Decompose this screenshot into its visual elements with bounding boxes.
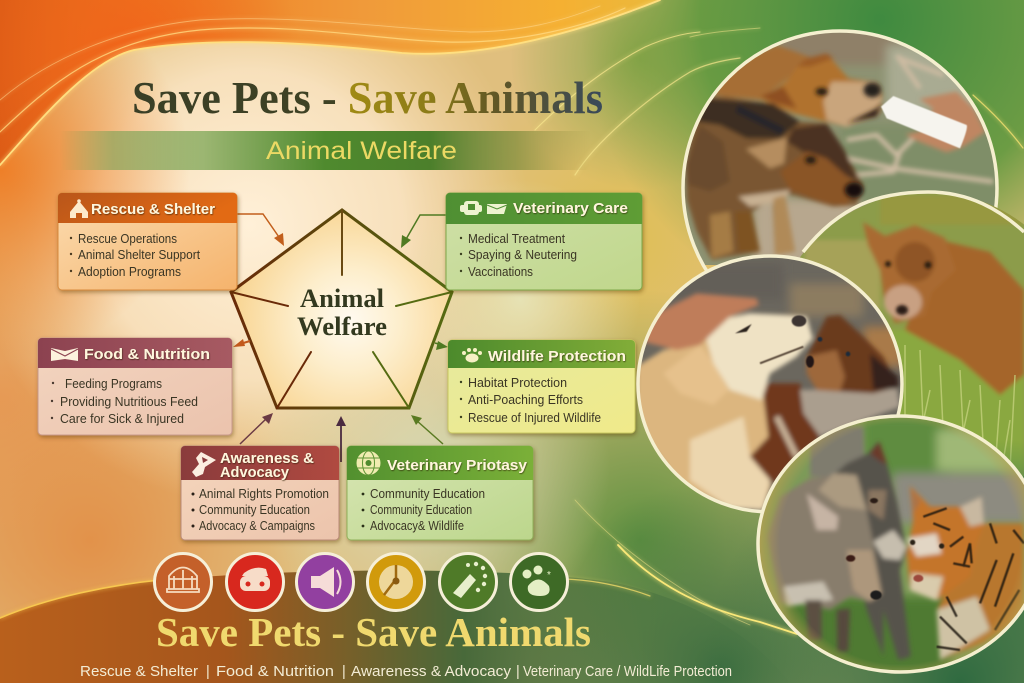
subtitle ribbon: Animal Welfare — [266, 137, 457, 165]
panel: wildlife protection: Anti-Poaching Efforts — [468, 393, 583, 407]
icon: shelter house — [70, 199, 88, 218]
panel: veterinary care: Veterinary Care — [513, 200, 628, 217]
panel: food and nutrition — [38, 338, 232, 435]
panel: food and nutrition: Food & Nutrition — [84, 346, 210, 363]
arrow: veterinary to pentagon — [401, 215, 446, 248]
panel: awareness and advocacy — [181, 446, 339, 540]
footer categories line: Awareness & Advocacy — [351, 664, 512, 680]
panel: food and nutrition: Feeding Programs — [65, 377, 162, 391]
icon: food bowl — [226, 554, 284, 610]
arrow: center to pentagon — [336, 416, 346, 462]
arrow: priority to pentagon — [411, 415, 443, 444]
panel: veterinary care: Medical Treatment — [468, 232, 565, 246]
icon: megaphone — [296, 554, 354, 610]
panel: food and nutrition: Care for Sick & Injured — [60, 412, 184, 426]
footer categories line — [80, 664, 732, 680]
panel: rescue and shelter: Adoption Programs — [78, 265, 181, 279]
icon: paw group: * — [547, 570, 551, 581]
panel: veterinary priotasy — [347, 446, 533, 540]
panel: rescue and shelter: Rescue Operations — [78, 232, 177, 246]
panel: veterinary care: Vaccinations — [468, 265, 533, 279]
panel: wildlife protection: Rescue of Injured Wildlife — [468, 411, 601, 425]
photo: golden dog and hand — [630, 250, 907, 517]
icon: paw — [462, 348, 482, 362]
icon: paw group — [510, 554, 568, 610]
subtitle ribbon — [60, 131, 590, 170]
footer categories line: Food & Nutrition — [216, 664, 334, 680]
panel: wildlife protection: Habitat Protection — [468, 376, 567, 390]
arrow: pentagon to wildlife — [435, 341, 448, 350]
panel: veterinary care — [446, 193, 642, 290]
panel: rescue and shelter: Animal Shelter Support — [78, 248, 200, 262]
panel: awareness and advocacy: Advocacy & Campaigns — [199, 519, 315, 533]
panel: awareness and advocacy: Awareness & — [220, 450, 314, 467]
panel: veterinary care: Spaying & Neutering — [468, 248, 577, 262]
photo ring — [803, 192, 1024, 252]
panel: awareness and advocacy: Advocacy — [220, 464, 290, 481]
panel: awareness and advocacy: Animal Rights Promotion — [199, 487, 329, 501]
photo: brown dog in grass — [800, 190, 1024, 476]
icon row — [154, 554, 568, 610]
icon: syringe and dots — [440, 554, 496, 610]
arrow: awareness to pentagon — [240, 413, 273, 444]
footer categories line: | — [342, 664, 346, 680]
icon: veterinary kit — [460, 201, 507, 215]
footer categories line: | — [516, 664, 520, 680]
central pentagon — [231, 210, 452, 408]
panel: rescue and shelter: Rescue & Shelter — [91, 201, 215, 218]
icon: megaphone flag — [192, 452, 216, 477]
arrow: pentagon to food — [233, 339, 250, 347]
panel: veterinary priotasy: Veterinary Priotasy — [387, 457, 528, 474]
footer headline: Save Pets - Save Animals — [156, 609, 591, 655]
icon: globe — [356, 451, 380, 475]
icon: rescue cage — [154, 554, 212, 610]
icon: envelope — [51, 348, 78, 361]
panel: wildlife protection — [448, 340, 635, 433]
panel: wildlife protection: Wildlife Protection — [488, 348, 626, 365]
central pentagon: Welfare — [297, 312, 387, 341]
title: Save Pets - Save Animals — [132, 72, 603, 123]
photo: dogs fed from a bottle — [681, 29, 999, 271]
panel: veterinary priotasy: Advocacy& Wildlife — [370, 519, 464, 533]
icon: gold medal — [368, 554, 424, 610]
central pentagon: Animal — [300, 284, 384, 313]
photo: donkey, wolf and tiger — [750, 410, 1024, 680]
arrow: rescue to pentagon — [237, 214, 284, 246]
panel: veterinary priotasy: Community Education — [370, 487, 485, 501]
panel: veterinary priotasy: Community Education — [370, 503, 472, 517]
footer categories line: Rescue & Shelter — [80, 664, 198, 680]
footer categories line: | — [206, 664, 210, 680]
panel: awareness and advocacy: Community Education — [199, 503, 310, 517]
panel: rescue and shelter — [58, 193, 237, 290]
footer categories line: Veterinary Care / WildLife Protection — [523, 664, 732, 680]
panel: food and nutrition: Providing Nutritious Feed — [60, 395, 198, 409]
